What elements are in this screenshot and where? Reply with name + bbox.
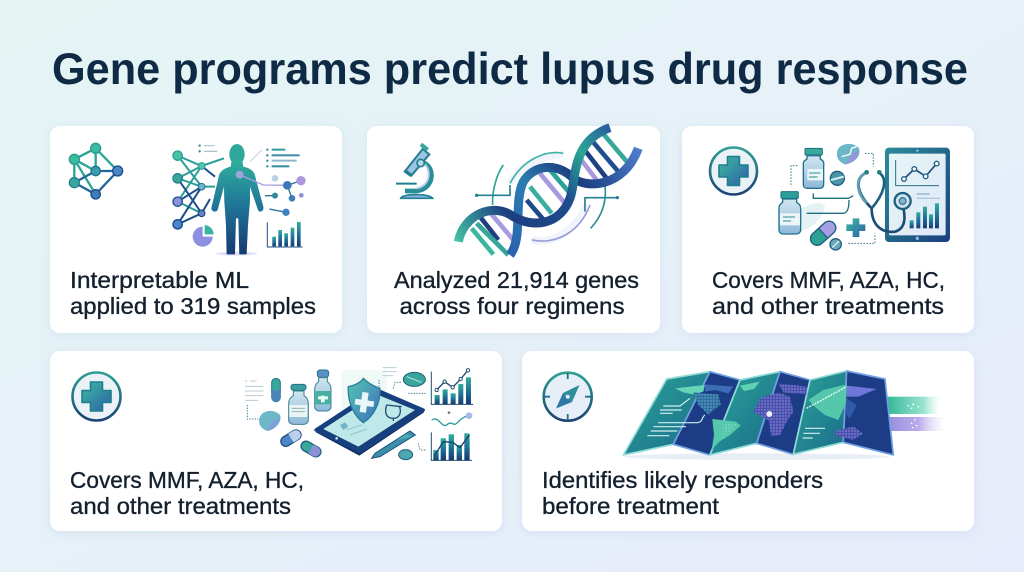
illustration: folded world map bbox=[623, 371, 945, 460]
text: treatments top: and other treatments bbox=[712, 293, 944, 319]
text: identifies responders bbox=[542, 467, 823, 519]
text: treatments bottom bbox=[70, 467, 304, 519]
text: analyzed genes: across four regimens bbox=[400, 293, 624, 319]
text: treatments bottom: and other treatments bbox=[70, 493, 291, 519]
panel: treatments top bbox=[682, 126, 974, 333]
title: Gene programs predict lupus drug response bbox=[52, 45, 968, 94]
icon: microscope bbox=[396, 143, 433, 198]
text: treatments top bbox=[712, 267, 945, 319]
text: treatments top: Covers MMF, AZA, HC, bbox=[712, 267, 945, 293]
text: analyzed genes: Analyzed 21,914 genes bbox=[394, 267, 639, 293]
text: analyzed genes bbox=[394, 267, 639, 319]
panel: interpretable ML bbox=[50, 126, 342, 333]
panel: treatments bottom bbox=[50, 351, 502, 531]
illustration: human body with data network bbox=[173, 144, 306, 256]
icon: medical cross bbox=[710, 148, 757, 194]
text: interpretable ML: applied to 319 samples bbox=[70, 293, 316, 319]
illustration: medication and tablet bbox=[779, 144, 950, 250]
text: interpretable ML: Interpretable ML bbox=[70, 267, 249, 293]
panel: analyzed genes bbox=[367, 126, 660, 333]
icon: neural network bbox=[69, 143, 123, 199]
icon: medical cross bbox=[72, 372, 120, 420]
illustration: DNA helix bbox=[458, 128, 638, 255]
panel: identifies responders bbox=[522, 351, 974, 531]
illustration: phone, medicines and charts bbox=[245, 368, 473, 460]
text: interpretable ML bbox=[70, 267, 316, 319]
text: identifies responders: before treatment bbox=[542, 493, 720, 519]
icon: compass bbox=[544, 373, 592, 421]
text: identifies responders: Identifies likely responders bbox=[542, 467, 823, 493]
text: treatments bottom: Covers MMF, AZA, HC, bbox=[70, 467, 304, 493]
